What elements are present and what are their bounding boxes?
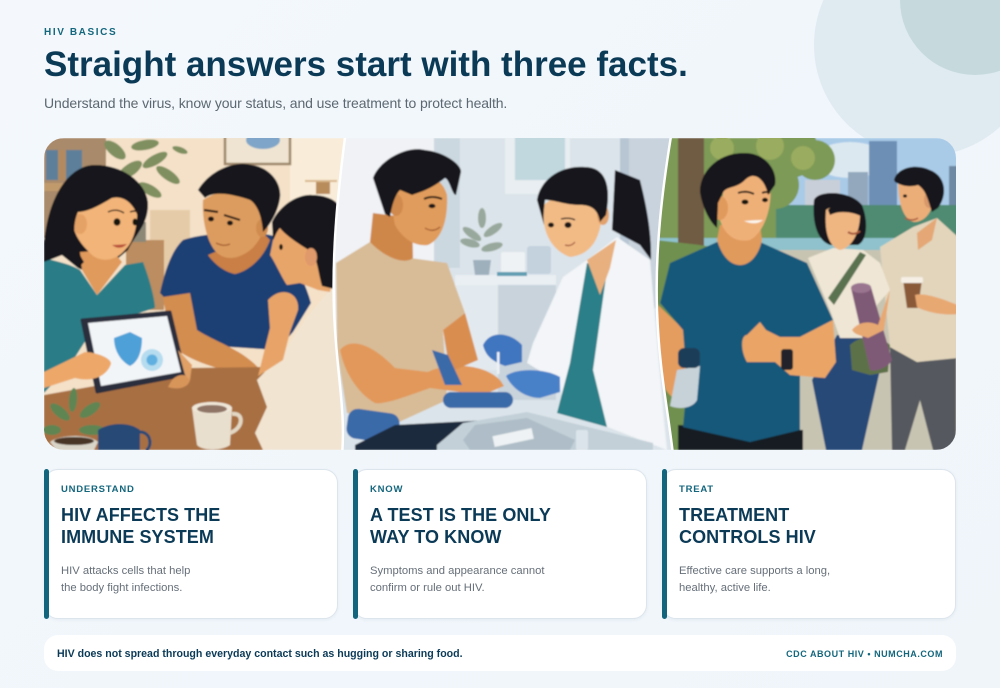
footer bar: HIV does not spread through everyday contact such as hugging or sharing food.	[57, 648, 463, 660]
woman with yoga mat	[808, 193, 892, 450]
card: treat: TREAT	[679, 484, 714, 495]
panel dividers	[334, 130, 346, 455]
footer bar: CDC ABOUT HIV • NUMCHA.COM	[786, 649, 943, 659]
footer bar	[44, 635, 956, 671]
man in beige tee	[336, 149, 504, 423]
subtitle: Understand the virus, know your status, and use treatment to protect health.	[44, 95, 507, 111]
card: treat: Effective care supports a long,	[679, 565, 830, 577]
man with coffee	[880, 167, 958, 450]
card: know: A TEST IS THE ONLY	[370, 505, 551, 525]
card: know	[353, 469, 647, 619]
woman in cream shirt	[255, 195, 346, 450]
scene: active life outdoors	[656, 122, 958, 450]
card: understand: HIV AFFECTS THE	[61, 505, 220, 525]
man in navy shirt	[160, 164, 311, 378]
card: know: KNOW	[370, 484, 403, 495]
mugs and plant	[43, 388, 241, 450]
scene: couple learning with tablet	[43, 130, 346, 450]
eyebrow: HIV BASICS	[44, 27, 117, 38]
scene: HIV test at clinic	[334, 130, 674, 450]
card: understand: the body fight infections.	[61, 582, 182, 594]
decorative circles	[814, 0, 1000, 152]
title: Straight answers start with three facts.	[44, 45, 688, 84]
card: understand	[44, 469, 338, 619]
card: know: Symptoms and appearance cannot	[370, 565, 544, 577]
card: treat	[662, 469, 956, 619]
table	[44, 366, 268, 450]
card: treat: healthy, active life.	[679, 582, 771, 594]
tablet	[44, 312, 192, 392]
card: understand: IMMUNE SYSTEM	[61, 527, 214, 547]
card: treat: TREATMENT	[679, 505, 789, 525]
card: treat: CONTROLS HIV	[679, 527, 816, 547]
illustration: three scenes	[44, 138, 956, 450]
card: understand: HIV attacks cells that help	[61, 565, 190, 577]
man in teal-blue tee	[658, 153, 836, 450]
card: know: confirm or rule out HIV.	[370, 582, 485, 594]
woman in teal top	[44, 165, 155, 393]
card: know: WAY TO KNOW	[370, 527, 501, 547]
card: understand: UNDERSTAND	[61, 484, 135, 495]
doctor in white coat	[437, 167, 667, 450]
clinic chair	[345, 350, 513, 444]
